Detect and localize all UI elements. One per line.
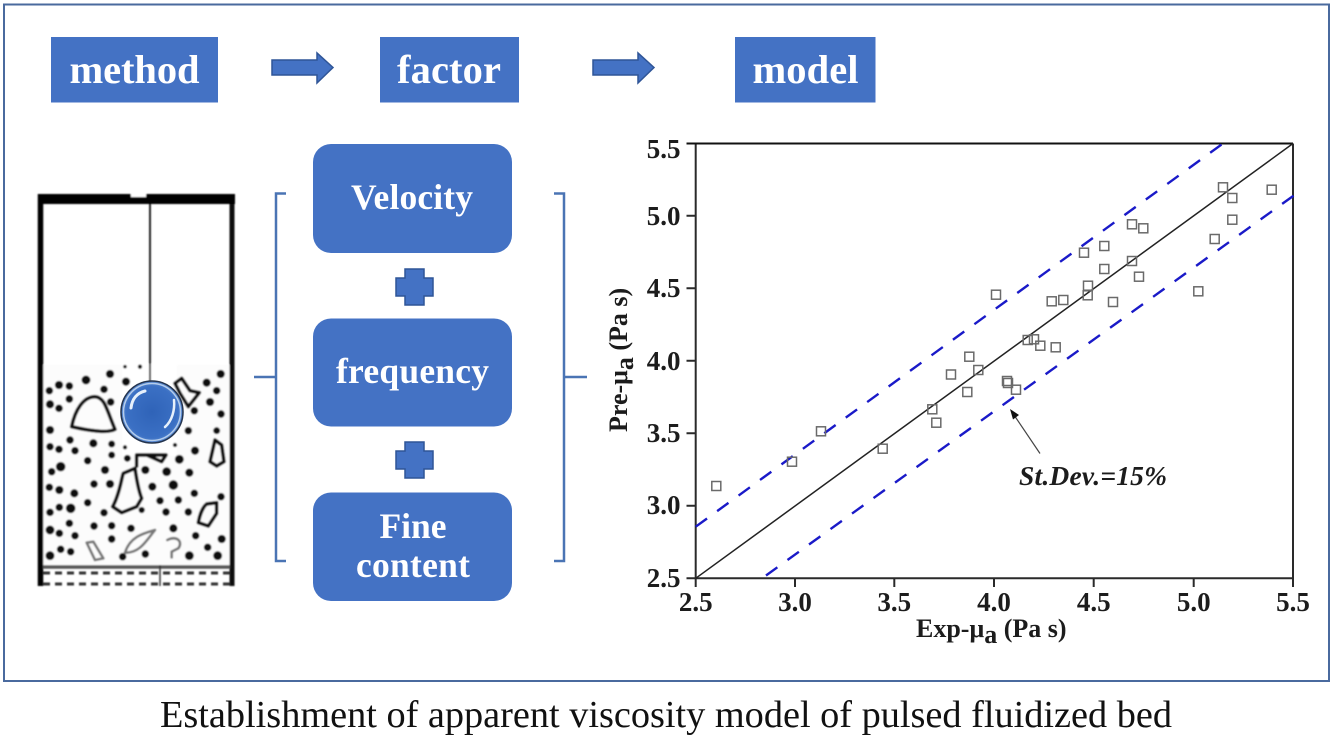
box: fine content: content [356, 545, 470, 585]
box: velocity: Velocity [351, 177, 473, 217]
x axis tick labels [679, 587, 1310, 617]
x axis tick labels: 5.0 [1177, 587, 1211, 617]
box: fine content [313, 492, 512, 601]
right bracket [554, 194, 587, 561]
icon: plus 1 [396, 269, 433, 305]
y axis tick labels: 4.0 [647, 346, 680, 376]
x axis tick labels: 4.5 [1077, 587, 1111, 617]
caption: Establishment of apparent viscosity model of pulsed fluidized bed [160, 694, 1172, 736]
y axis title: (Pa s) [604, 288, 633, 357]
y axis title: a [610, 357, 639, 370]
box: velocity [313, 144, 512, 253]
upper deviation line [696, 142, 1225, 527]
x axis title: (Pa s) [997, 614, 1067, 643]
y axis tick labels: 2.5 [647, 563, 680, 593]
y axis tick labels: 3.5 [647, 418, 680, 448]
box: model: model [752, 47, 858, 92]
box: model [735, 37, 876, 102]
x axis tick labels: 3.0 [778, 587, 812, 617]
box: frequency: frequency [336, 351, 489, 391]
x axis tick labels: 5.5 [1276, 587, 1310, 617]
y axis tick labels [647, 134, 680, 593]
y axis tick labels: 5.5 [647, 134, 680, 164]
box: method: method [70, 47, 200, 92]
icon: blue sphere [121, 381, 183, 443]
y axis tick labels: 5.0 [647, 201, 680, 231]
apparatus: pulsed fluidized bed schematic [38, 194, 235, 586]
reference line y=x [696, 144, 1293, 578]
box: frequency [313, 318, 512, 426]
plot frame and ticks [686, 144, 1293, 587]
icon: plus 2 [396, 442, 433, 478]
box: method [51, 37, 218, 102]
scatter chart: predicted vs experimental viscosity [604, 134, 1310, 649]
callout arrow [1010, 409, 1040, 454]
x axis tick labels: 4.0 [977, 587, 1011, 617]
left bracket [254, 194, 286, 561]
y axis tick labels: 4.5 [647, 273, 680, 303]
arrow: method to factor [272, 53, 333, 83]
lower deviation line [766, 192, 1298, 576]
x axis title: a [984, 620, 997, 649]
box: factor [380, 37, 519, 102]
x axis title: Exp-μ [916, 614, 984, 643]
y axis title: Pre-μ [604, 370, 633, 432]
y axis tick labels: 3.0 [647, 490, 680, 520]
header flow: method, factor, model [51, 37, 876, 102]
x axis tick labels: 3.5 [877, 587, 911, 617]
box: fine content: Fine [380, 506, 446, 546]
arrow: factor to model [593, 53, 654, 83]
factor stack [313, 144, 512, 601]
callout: standard deviation: St.Dev.=15% [1019, 460, 1167, 491]
x axis tick labels: 2.5 [679, 587, 713, 617]
data points [712, 183, 1276, 491]
box: factor: factor [397, 47, 501, 92]
bed walls and particles [38, 194, 235, 586]
